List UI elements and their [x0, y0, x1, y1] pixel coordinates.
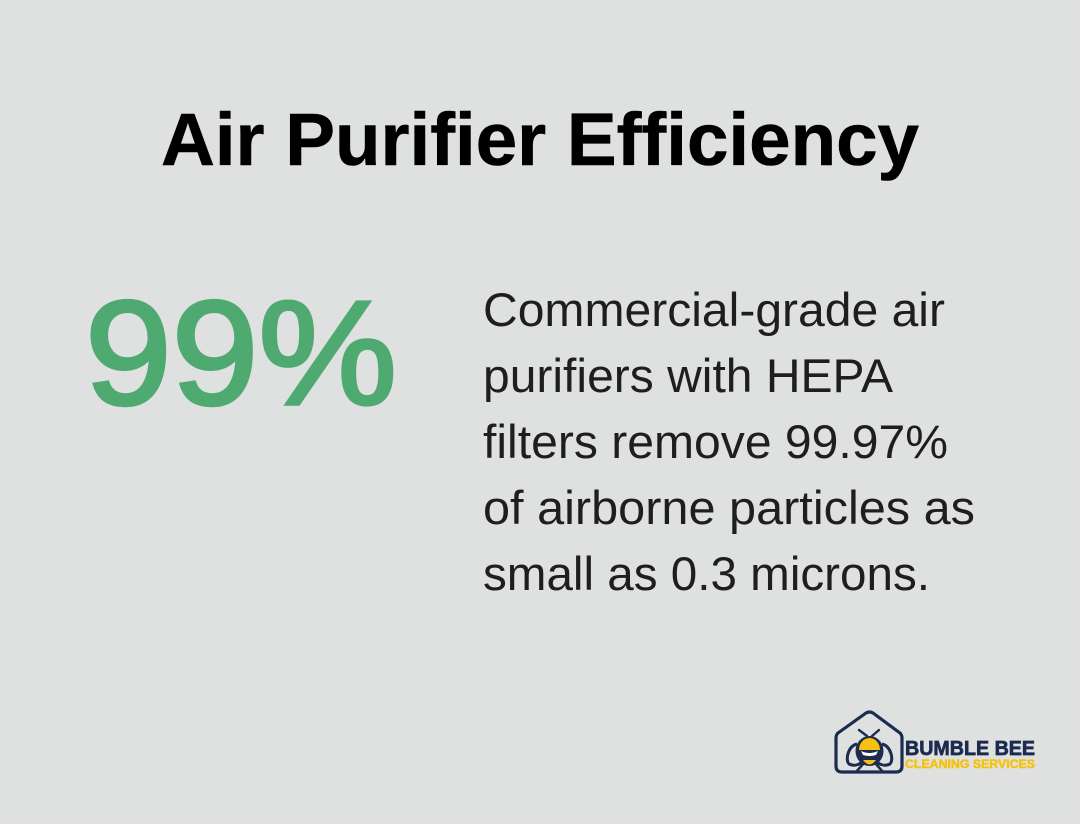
description text: filters remove 99.97% — [483, 415, 948, 468]
icon: house with bee — [836, 712, 902, 772]
big statistic: 99%: 99% — [85, 271, 397, 436]
wordmark: Bumble Bee: BUMBLE BEE — [905, 738, 1035, 760]
description text: small as 0.3 microns. — [483, 547, 930, 600]
title: Air Purifier Efficiency — [161, 98, 919, 181]
description text: Commercial-grade air — [483, 283, 945, 336]
logo: Bumble Bee Cleaning Services — [836, 712, 1035, 772]
description text — [483, 283, 975, 600]
tagline: Cleaning Services: CLEANING SERVICES — [905, 757, 1035, 771]
description text: purifiers with HEPA — [483, 349, 894, 402]
description text: of airborne particles as — [483, 481, 975, 534]
